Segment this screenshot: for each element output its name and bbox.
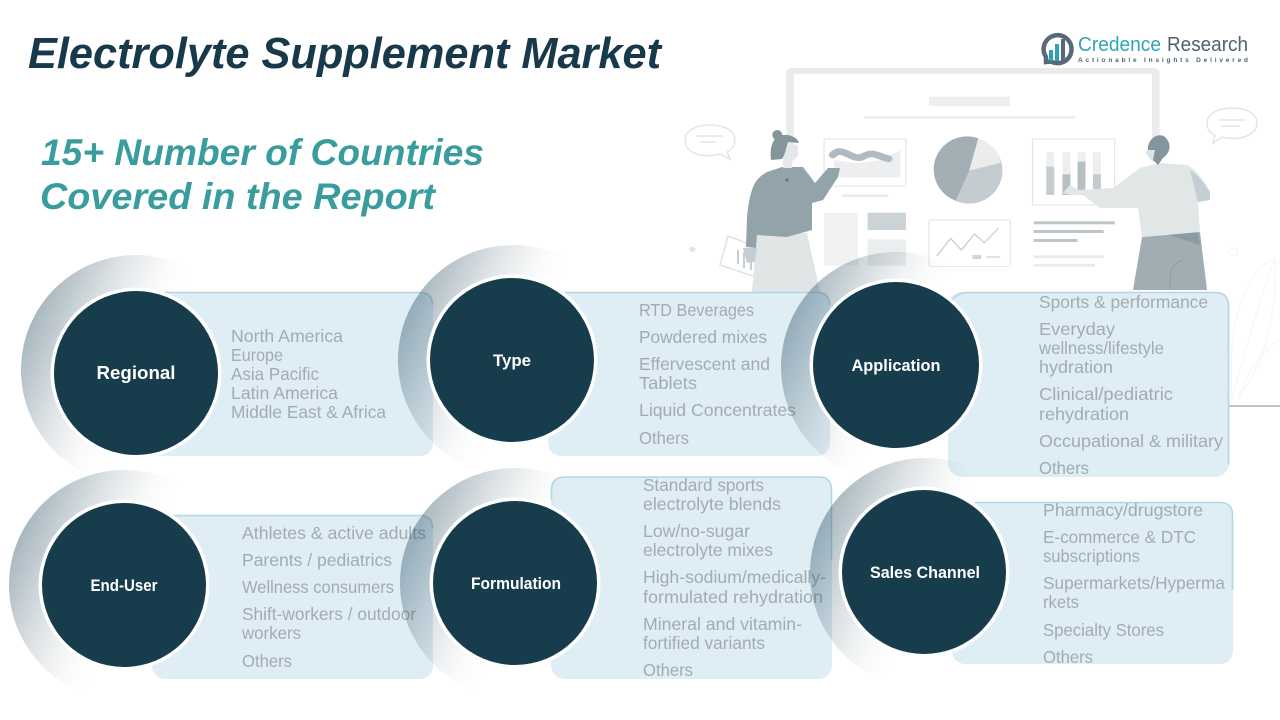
segment: Formulation: [400, 468, 832, 698]
panel: regional list: [150, 292, 433, 456]
panel: sales channel list: [952, 500, 1233, 667]
panel: type list: [548, 292, 830, 456]
text: formulations: Others: [643, 660, 693, 680]
woman presenter: [720, 130, 840, 292]
text: end users: Parents / pediatrics: [242, 550, 392, 570]
text: formulations: electrolyte mixes: [643, 540, 773, 560]
text: applications: Sports & performance: [1039, 292, 1208, 312]
decorative leaves: [1231, 258, 1280, 402]
circle: Application: Application: [852, 357, 940, 375]
circle: Type: Type: [493, 351, 531, 370]
text: formulations: formulated rehydration: [643, 587, 823, 607]
text: regions: Europe: [231, 345, 283, 365]
text: formulations: Standard sports: [643, 475, 764, 495]
text: sales channels: [1043, 500, 1225, 667]
text: types: RTD Beverages: [639, 300, 754, 320]
logo wordmark: Research: [1167, 34, 1248, 56]
circle: Application: [781, 252, 1011, 482]
text: regions: Latin America: [231, 383, 338, 403]
icon: logo chart ring: [1044, 35, 1072, 63]
text: sales channels: subscriptions: [1043, 546, 1140, 566]
subtitle: countries covered: Covered in the Report: [40, 176, 437, 217]
text: end users: Athletes & active adults: [242, 523, 426, 543]
man presenter: [1063, 135, 1210, 290]
circle: Formulation: [400, 468, 630, 698]
circle: End-User: [9, 470, 239, 700]
subtitle: countries covered: [40, 132, 484, 217]
text: regions: North America: [231, 326, 343, 346]
text: applications: [1038, 292, 1223, 478]
circle: Regional: [21, 255, 251, 485]
circle: End-User: End-User: [90, 577, 158, 595]
logo wordmark: [1078, 34, 1248, 64]
text: types: [639, 300, 796, 448]
segment: Type: [398, 245, 830, 475]
text: formulations: electrolyte blends: [643, 494, 781, 514]
title: Electrolyte Supplement Market: [28, 29, 663, 78]
circle: Regional: Regional: [96, 363, 176, 383]
text: applications: Others: [1039, 458, 1089, 478]
text: applications: hydration: [1039, 357, 1113, 377]
text: formulations: High-sodium/medically-: [643, 567, 826, 587]
logo wordmark: Credence: [1078, 34, 1161, 56]
text: formulations: Mineral and vitamin-: [643, 614, 802, 634]
speech bubble left: [685, 125, 735, 159]
text: formulations: [643, 475, 826, 680]
circle: Formulation: Formulation: [471, 575, 561, 593]
text: regions: Asia Pacific: [231, 364, 319, 384]
segment: End-User: [9, 470, 433, 700]
presentation board: [689, 71, 1238, 267]
text: end users: Wellness consumers: [242, 577, 394, 597]
text: end users: Others: [242, 651, 292, 671]
segment: Application: [781, 252, 1229, 482]
logo wordmark: Actionable Insights Delivered: [1078, 57, 1248, 64]
circle: Sales Channel: Sales Channel: [870, 564, 980, 582]
circle: Type: [398, 245, 628, 475]
text: end users: workers: [241, 623, 301, 643]
text: formulations: Low/no-sugar: [643, 521, 750, 541]
segment: Regional: [21, 255, 433, 485]
illustration: presentation board with two people: [685, 71, 1257, 292]
text: sales channels: Specialty Stores: [1043, 620, 1164, 640]
panel: application list: [948, 292, 1229, 478]
text: applications: wellness/lifestyle: [1038, 338, 1164, 358]
logo: Credence Research: [1044, 34, 1248, 64]
text: sales channels: Others: [1043, 647, 1093, 667]
text: applications: rehydration: [1039, 404, 1129, 424]
text: applications: Clinical/pediatric: [1039, 384, 1173, 404]
text: sales channels: Supermarkets/Hyperma: [1043, 573, 1225, 593]
circle: Sales Channel: [810, 458, 1040, 688]
text: types: Powdered mixes: [639, 327, 767, 347]
text: types: Others: [639, 428, 689, 448]
panel: end-user list: [152, 515, 433, 679]
text: regions: Middle East & Africa: [231, 402, 386, 422]
text: types: Liquid Concentrates: [639, 400, 796, 420]
panel: formulation list: [551, 475, 832, 680]
text: types: Effervescent and: [639, 354, 770, 374]
text: sales channels: Pharmacy/drugstore: [1043, 500, 1203, 520]
text: types: Tablets: [639, 373, 697, 393]
text: applications: Everyday: [1039, 319, 1115, 339]
text: end users: Shift-workers / outdoor: [242, 604, 416, 624]
text: regions: [231, 326, 386, 422]
segment: Sales Channel: [810, 458, 1233, 688]
text: end users: [241, 523, 426, 671]
subtitle: countries covered: 15+ Number of Countries: [41, 132, 484, 173]
text: sales channels: rkets: [1043, 592, 1079, 612]
text: applications: Occupational & military: [1039, 431, 1223, 451]
text: formulations: fortified variants: [643, 633, 765, 653]
speech bubble right: [1207, 108, 1257, 143]
text: sales channels: E-commerce & DTC: [1043, 527, 1196, 547]
